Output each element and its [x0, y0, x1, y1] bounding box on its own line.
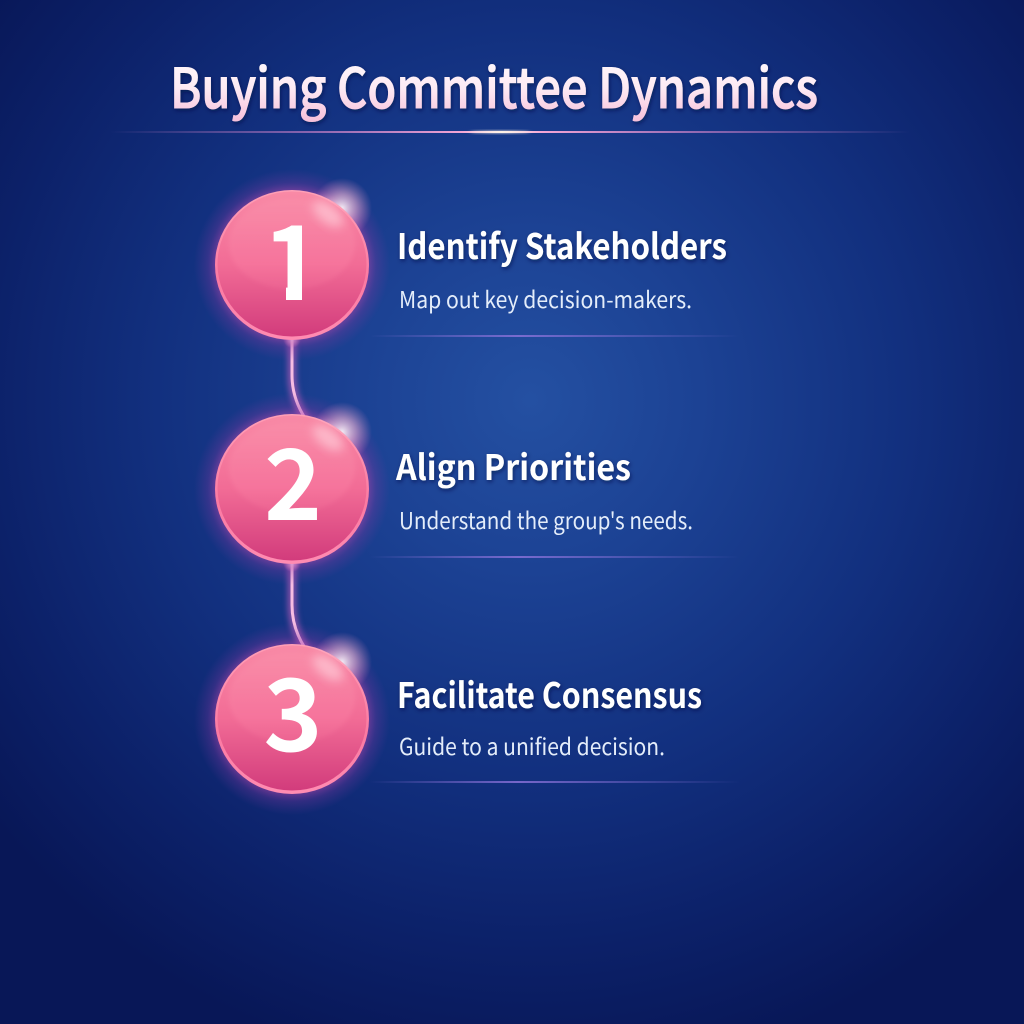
- step 1 separator: [370, 335, 740, 337]
- icon: number badge 3: [194, 623, 390, 815]
- step 2 heading: Align Priorities: [395, 440, 631, 491]
- icon: number badge 2: 2: [264, 407, 322, 549]
- title: Buying Committee Dynamics: [170, 44, 818, 124]
- step 2: [194, 393, 740, 585]
- title underline: [110, 130, 910, 134]
- step 1 description: Map out key decision-makers.: [399, 281, 692, 315]
- step 2 separator: [370, 556, 740, 558]
- step 3 separator: [370, 781, 740, 783]
- icon: number badge 1: [194, 169, 390, 361]
- step 2 description: Understand the group's needs.: [399, 502, 693, 536]
- icon: number badge 3: 3: [264, 635, 322, 780]
- icon: number badge 2: [194, 393, 390, 585]
- connector: step 1 to step 2: [283, 330, 305, 418]
- step 1 heading: Identify Stakeholders: [397, 219, 727, 270]
- step 1: [194, 169, 740, 361]
- step 3 heading: Facilitate Consensus: [397, 668, 702, 719]
- connector: step 2 to step 3: [283, 554, 305, 648]
- step 3: [194, 623, 740, 815]
- step 3 description: Guide to a unified decision.: [399, 728, 665, 762]
- icon: number badge 1: 1: [263, 181, 323, 330]
